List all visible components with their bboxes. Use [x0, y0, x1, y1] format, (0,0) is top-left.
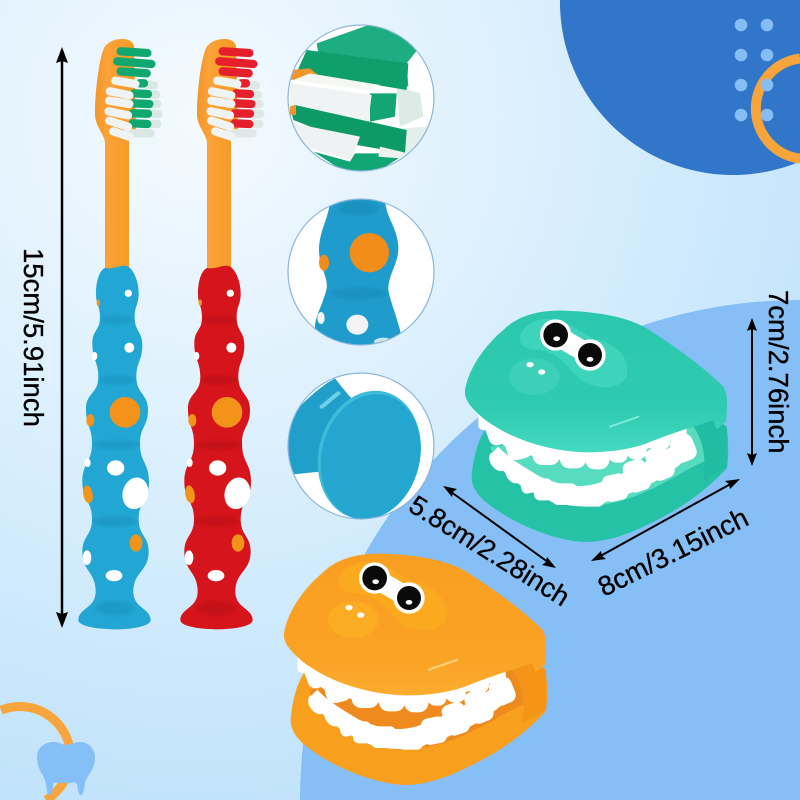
box lid [284, 554, 546, 695]
dot grid [735, 19, 773, 121]
eyes [540, 319, 606, 371]
box base [472, 420, 728, 542]
mouth interior [309, 670, 526, 750]
label: 8cm: 8cm/3.15inch [593, 502, 753, 602]
icon: tooth [37, 742, 95, 795]
nose bump [328, 601, 379, 638]
teal denture box [465, 311, 728, 542]
label: 15cm: 15cm/5.91inch [18, 248, 49, 427]
orange denture box [284, 554, 547, 785]
brush head and neck [197, 39, 238, 270]
dark blue corner circle [560, 0, 800, 175]
lower teeth [486, 432, 699, 507]
eye bump [520, 319, 627, 387]
orange ring top right [756, 58, 800, 159]
label: 7cm: 7cm/2.76inch [763, 290, 794, 454]
handle [78, 266, 152, 629]
handle [180, 266, 254, 629]
detail circle: bristles [288, 23, 434, 173]
label: 5.8cm: 5.8cm/2.28inch [404, 490, 575, 612]
bristles [211, 51, 260, 137]
upper teeth [478, 413, 687, 469]
detail circle: suction cup [287, 373, 434, 530]
depth arrow [443, 486, 556, 568]
detail circle: handle dots [288, 198, 434, 347]
upper teeth [297, 656, 506, 712]
brush head and neck [95, 39, 136, 270]
height arrow right [747, 318, 757, 466]
mouth interior [490, 427, 707, 507]
width arrow [591, 479, 740, 561]
height arrow left [56, 47, 68, 628]
lower teeth [305, 675, 518, 750]
toothbrush: red [180, 39, 260, 629]
bristles [109, 51, 158, 137]
toothbrush: blue green [78, 39, 158, 629]
box base [291, 663, 547, 785]
eyes [359, 562, 425, 614]
orange ring bottom left [1, 706, 70, 800]
large light blue circle [300, 300, 800, 800]
box lid [465, 311, 727, 452]
nose bump [509, 358, 560, 395]
eye bump [339, 562, 446, 630]
